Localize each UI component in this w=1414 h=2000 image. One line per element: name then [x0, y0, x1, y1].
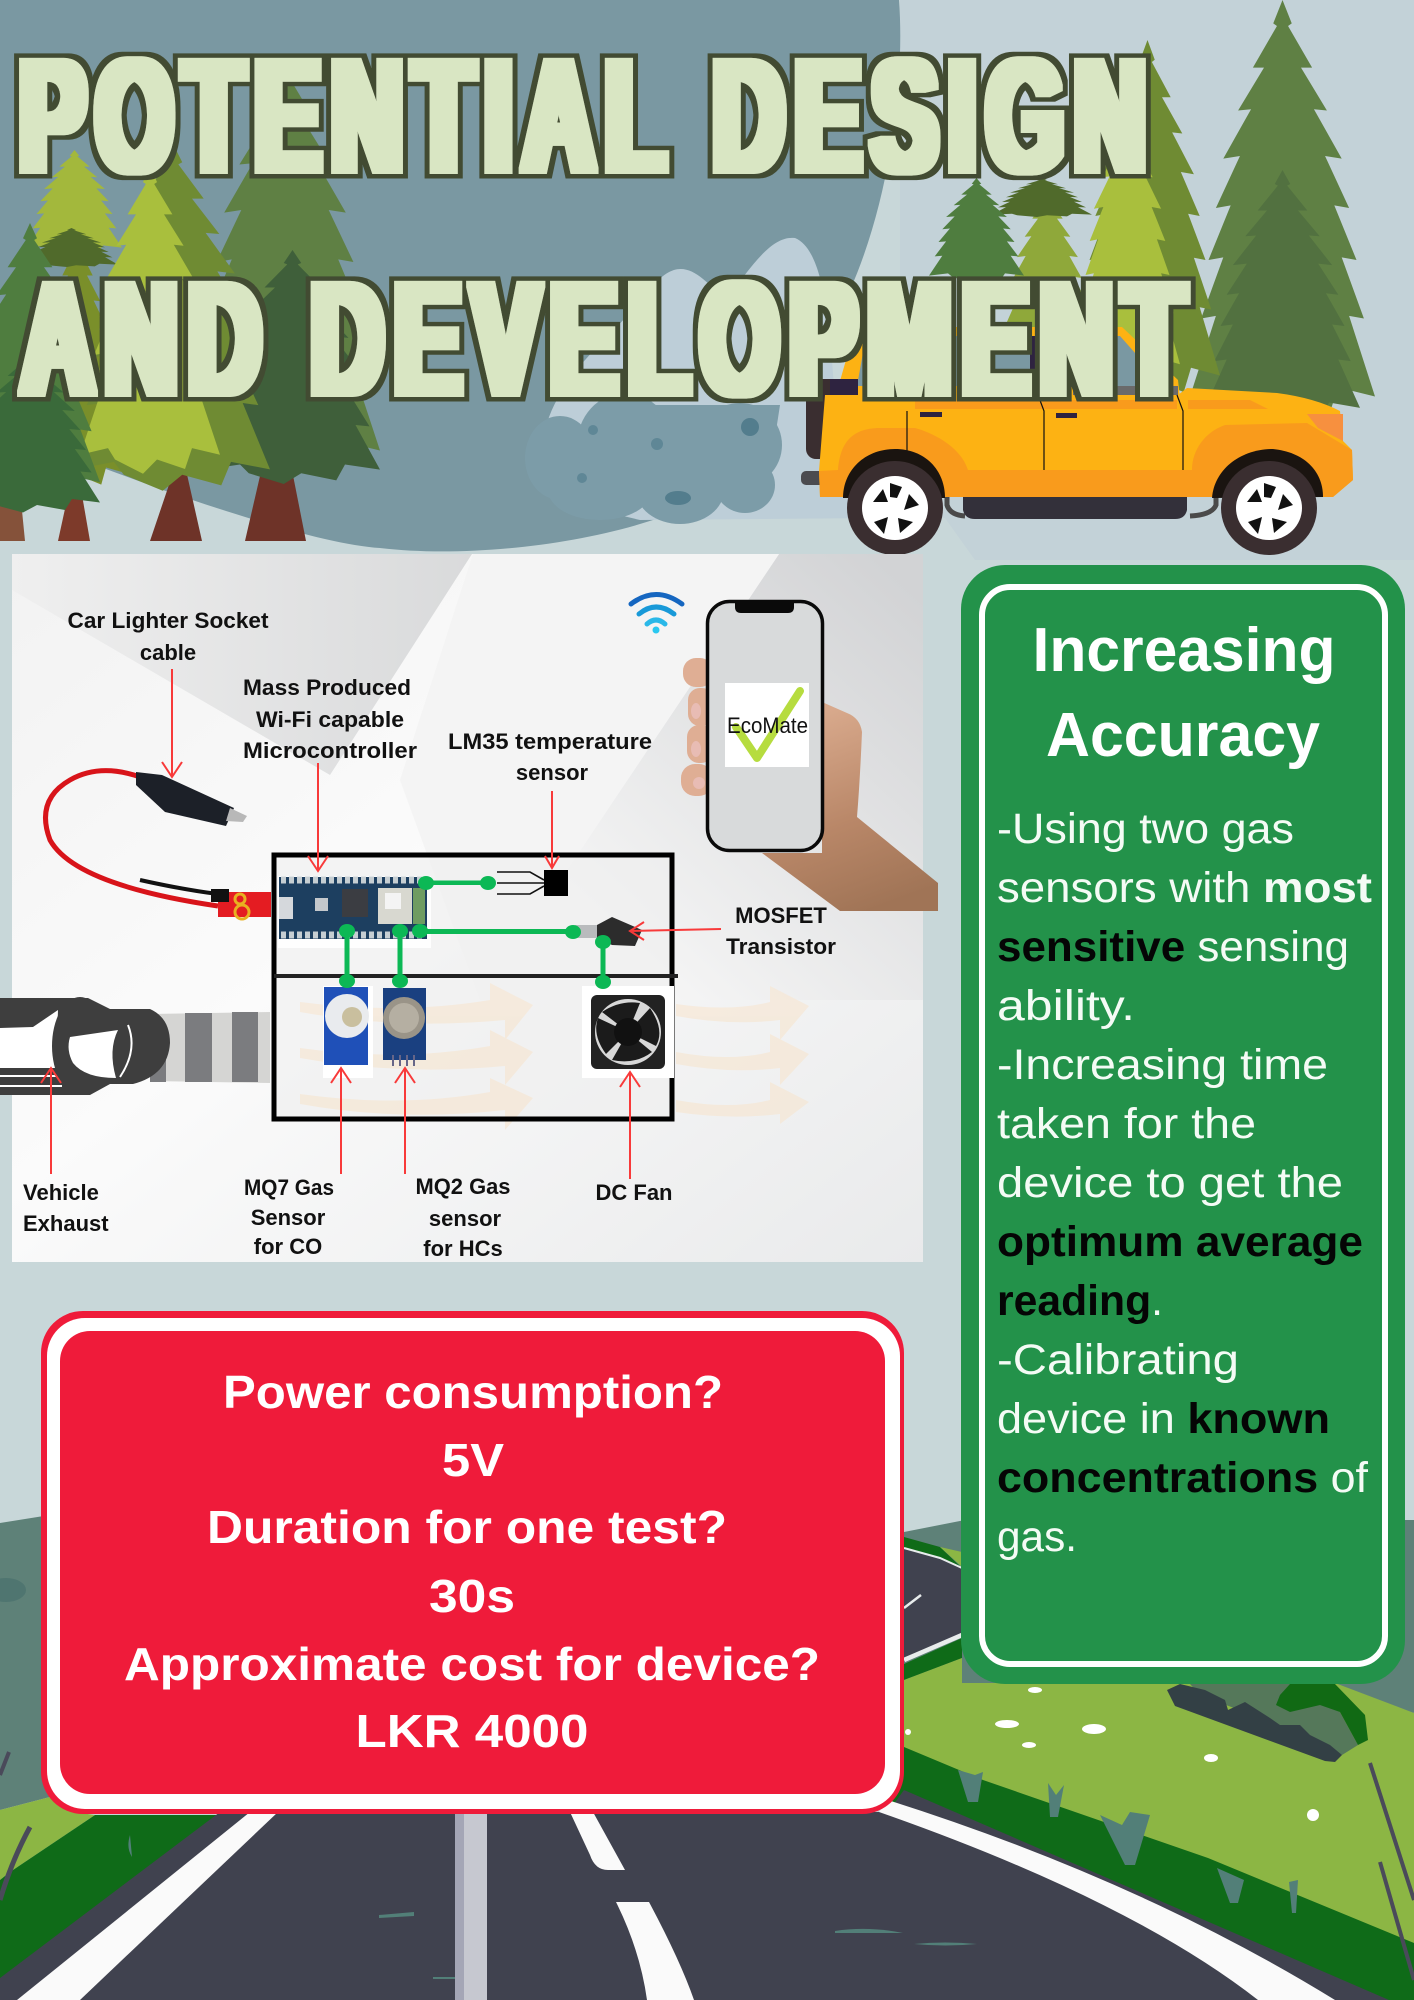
diagram labels: Exhaust [23, 1211, 109, 1236]
accuracy text: sensors with most [997, 864, 1372, 912]
car spare tire [806, 379, 842, 459]
accuracy text: -Calibrating [997, 1336, 1239, 1384]
phone [708, 602, 822, 850]
specs text: LKR 4000 [356, 1705, 588, 1757]
smoke backdrop [545, 238, 880, 520]
diagram labels: Microcontroller [243, 738, 417, 763]
diagram labels: cable [140, 640, 196, 665]
specs text: Power consumption? [223, 1366, 723, 1418]
MOSFET transistor [575, 917, 642, 946]
car windows [857, 336, 1143, 386]
microcontroller board [278, 876, 431, 948]
background hills [0, 1515, 1414, 1810]
lawn [0, 1658, 1414, 2000]
diagram labels: Sensor [251, 1205, 326, 1230]
specs text [124, 1366, 820, 1757]
front wheel [843, 449, 945, 555]
car cabin [832, 327, 1180, 398]
bush [1167, 1684, 1368, 1762]
palm and arm [762, 702, 938, 911]
diagram labels: for HCs [423, 1236, 503, 1261]
accuracy text: optimum average [997, 1218, 1363, 1266]
panel: device specs [41, 1311, 904, 1814]
accuracy text: taken for the [997, 1100, 1256, 1148]
MQ2 gas sensor [383, 988, 426, 1066]
diagram labels: sensor [516, 760, 589, 785]
car door lines [907, 395, 1183, 470]
diagram background [12, 554, 923, 1262]
diagram labels: Car Lighter Socket [68, 608, 269, 633]
car headlight [1307, 414, 1343, 441]
accuracy text: -Increasing time [997, 1041, 1328, 1089]
accuracy text: device to get the [997, 1159, 1343, 1207]
accuracy text: concentrations of [997, 1454, 1369, 1502]
right forest [929, 0, 1375, 424]
accuracy text: device in known [997, 1395, 1330, 1443]
DC fan [582, 986, 674, 1078]
road markings [17, 1800, 1335, 2000]
panel: device diagram [0, 554, 938, 1262]
red pointer arrows [41, 669, 721, 1179]
car lighter cable [46, 771, 271, 919]
distant road [904, 1548, 962, 1662]
grass verges [0, 1747, 1414, 2000]
car [801, 327, 1353, 555]
exhaust gas stripes [150, 1012, 270, 1083]
specs text: Duration for one test? [207, 1501, 727, 1553]
accuracy text: -Using two gas [997, 805, 1294, 853]
car lower trim [819, 423, 1353, 497]
road patches [379, 1912, 977, 1979]
panel: increasing accuracy [961, 565, 1405, 1684]
exhaust pipe [0, 997, 170, 1095]
EcoMate logo: EcoMate [727, 713, 808, 738]
dark blue hill [0, 0, 900, 551]
fingers [681, 658, 714, 796]
green wiring [339, 876, 611, 989]
sign post [455, 1800, 487, 2000]
diagram labels: Wi-Fi capable [256, 707, 404, 732]
specs text: Approximate cost for device? [124, 1638, 820, 1690]
diagram labels: Transistor [726, 934, 836, 959]
accuracy text: gas. [997, 1513, 1077, 1561]
diagram labels: LM35 temperature [448, 729, 652, 754]
diagram labels [23, 608, 836, 1261]
accuracy text [997, 805, 1372, 1561]
accuracy heading: Accuracy [1046, 701, 1321, 770]
specs text: 5V [442, 1434, 504, 1486]
car tail pipe [801, 471, 825, 485]
rear wheel [1212, 449, 1323, 555]
accuracy heading: Increasing [1032, 616, 1336, 685]
title [20, 26, 1196, 428]
diagram labels: sensor [429, 1206, 502, 1231]
diagram labels: Mass Produced [243, 675, 411, 700]
nails [691, 703, 705, 789]
left forest [0, 54, 380, 541]
road [0, 1790, 1389, 2000]
bare branches [0, 1752, 1414, 1980]
diagram labels: MQ7 Gas [244, 1175, 334, 1200]
diagram labels: for CO [254, 1234, 322, 1259]
diagram labels: Vehicle [23, 1180, 99, 1205]
diagram labels: MQ2 Gas [416, 1174, 510, 1199]
airflow arrows [300, 983, 809, 1130]
device enclosure [274, 855, 678, 1119]
icon: wi-fi [631, 594, 682, 634]
background panel tint [900, 0, 1414, 560]
accuracy text: ability. [997, 982, 1135, 1030]
accuracy text: reading. [997, 1277, 1163, 1325]
grass tufts [128, 1770, 1298, 1913]
car body [819, 388, 1353, 497]
EcoMate logo [725, 683, 809, 767]
phone hand [681, 658, 938, 911]
lawn flowers [905, 1687, 1319, 1821]
distant road edges [904, 1537, 962, 1680]
accuracy heading [1032, 616, 1336, 770]
LM35 temperature sensor [497, 870, 568, 896]
accuracy text: sensitive sensing [997, 923, 1349, 971]
MQ7 gas sensor [323, 986, 373, 1078]
specs text: 30s [429, 1570, 515, 1622]
diagram labels: MOSFET [735, 903, 827, 928]
exhaust smoke cloud [525, 393, 782, 524]
diagram labels: DC Fan [596, 1180, 672, 1205]
enclosure tint [274, 855, 672, 1119]
car chassis [947, 497, 1216, 519]
